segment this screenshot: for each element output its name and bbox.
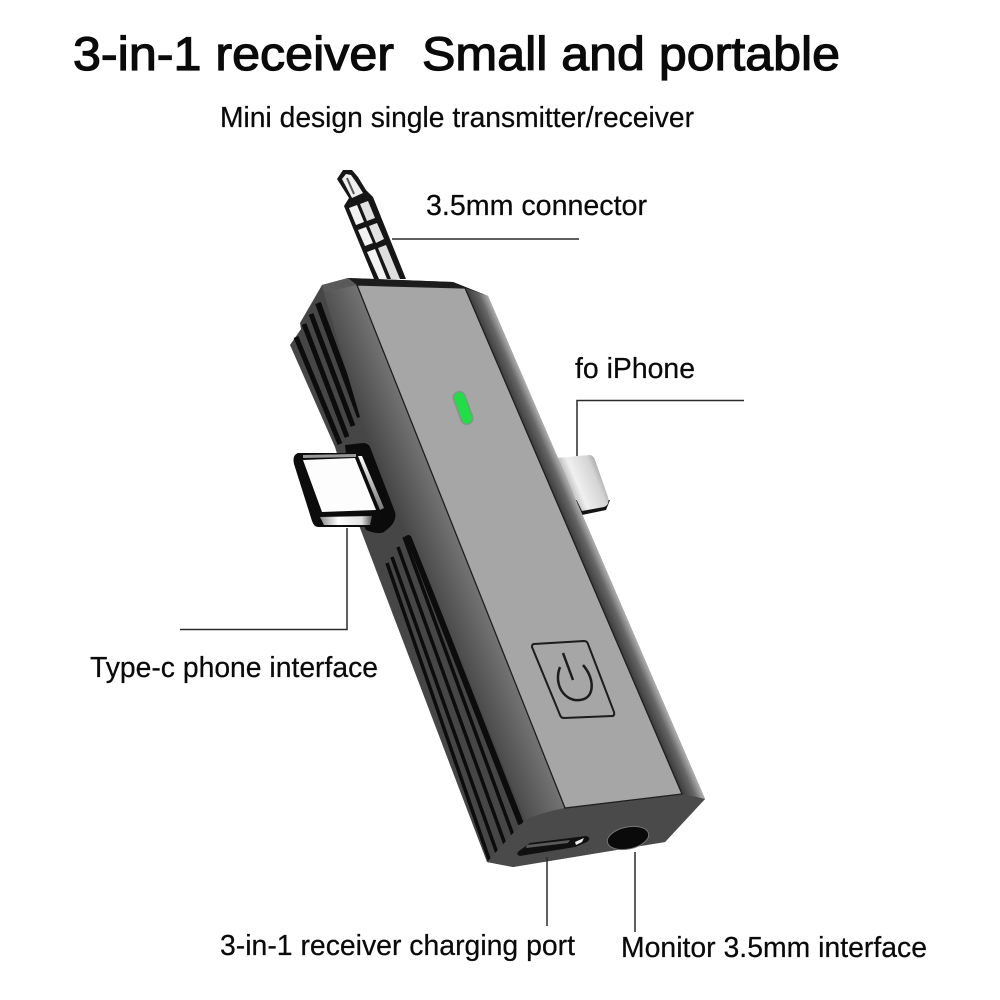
callout: 3.5mm connector: 3.5mm connector — [426, 190, 647, 222]
type-c connector — [294, 453, 384, 527]
subtitle: Mini design single transmitter/receiver — [220, 102, 694, 134]
device: 3-in-1 receiver — [290, 170, 705, 867]
callout: fo iPhone — [575, 353, 744, 456]
right bevel — [465, 288, 705, 799]
callout: monitor interface: Monitor 3.5mm interface — [621, 932, 927, 964]
callout: fo iPhone: fo iPhone — [575, 353, 695, 385]
callout: Type-c phone interface — [90, 528, 378, 684]
upper ribs — [296, 303, 360, 444]
charging port — [517, 836, 589, 856]
top cap — [348, 278, 488, 296]
3.5mm jack plug — [337, 170, 406, 279]
lightning connector — [556, 455, 610, 515]
bottom end face — [487, 794, 705, 867]
title — [73, 28, 840, 81]
status LED — [452, 390, 474, 426]
lower ribs — [387, 535, 521, 862]
callout: charging port: 3-in-1 receiver charging port — [220, 930, 575, 962]
type-c slot — [345, 443, 395, 533]
monitor jack — [605, 823, 651, 853]
top bevel — [322, 278, 357, 292]
title: 3-in-1 receiver — [73, 28, 394, 81]
power button — [532, 641, 614, 718]
front face — [357, 285, 682, 808]
body silhouette — [290, 278, 705, 867]
dark side panel — [322, 285, 565, 820]
callout: Type-c phone interface: Type-c phone interface — [90, 652, 378, 684]
title: Small and portable — [422, 28, 840, 81]
